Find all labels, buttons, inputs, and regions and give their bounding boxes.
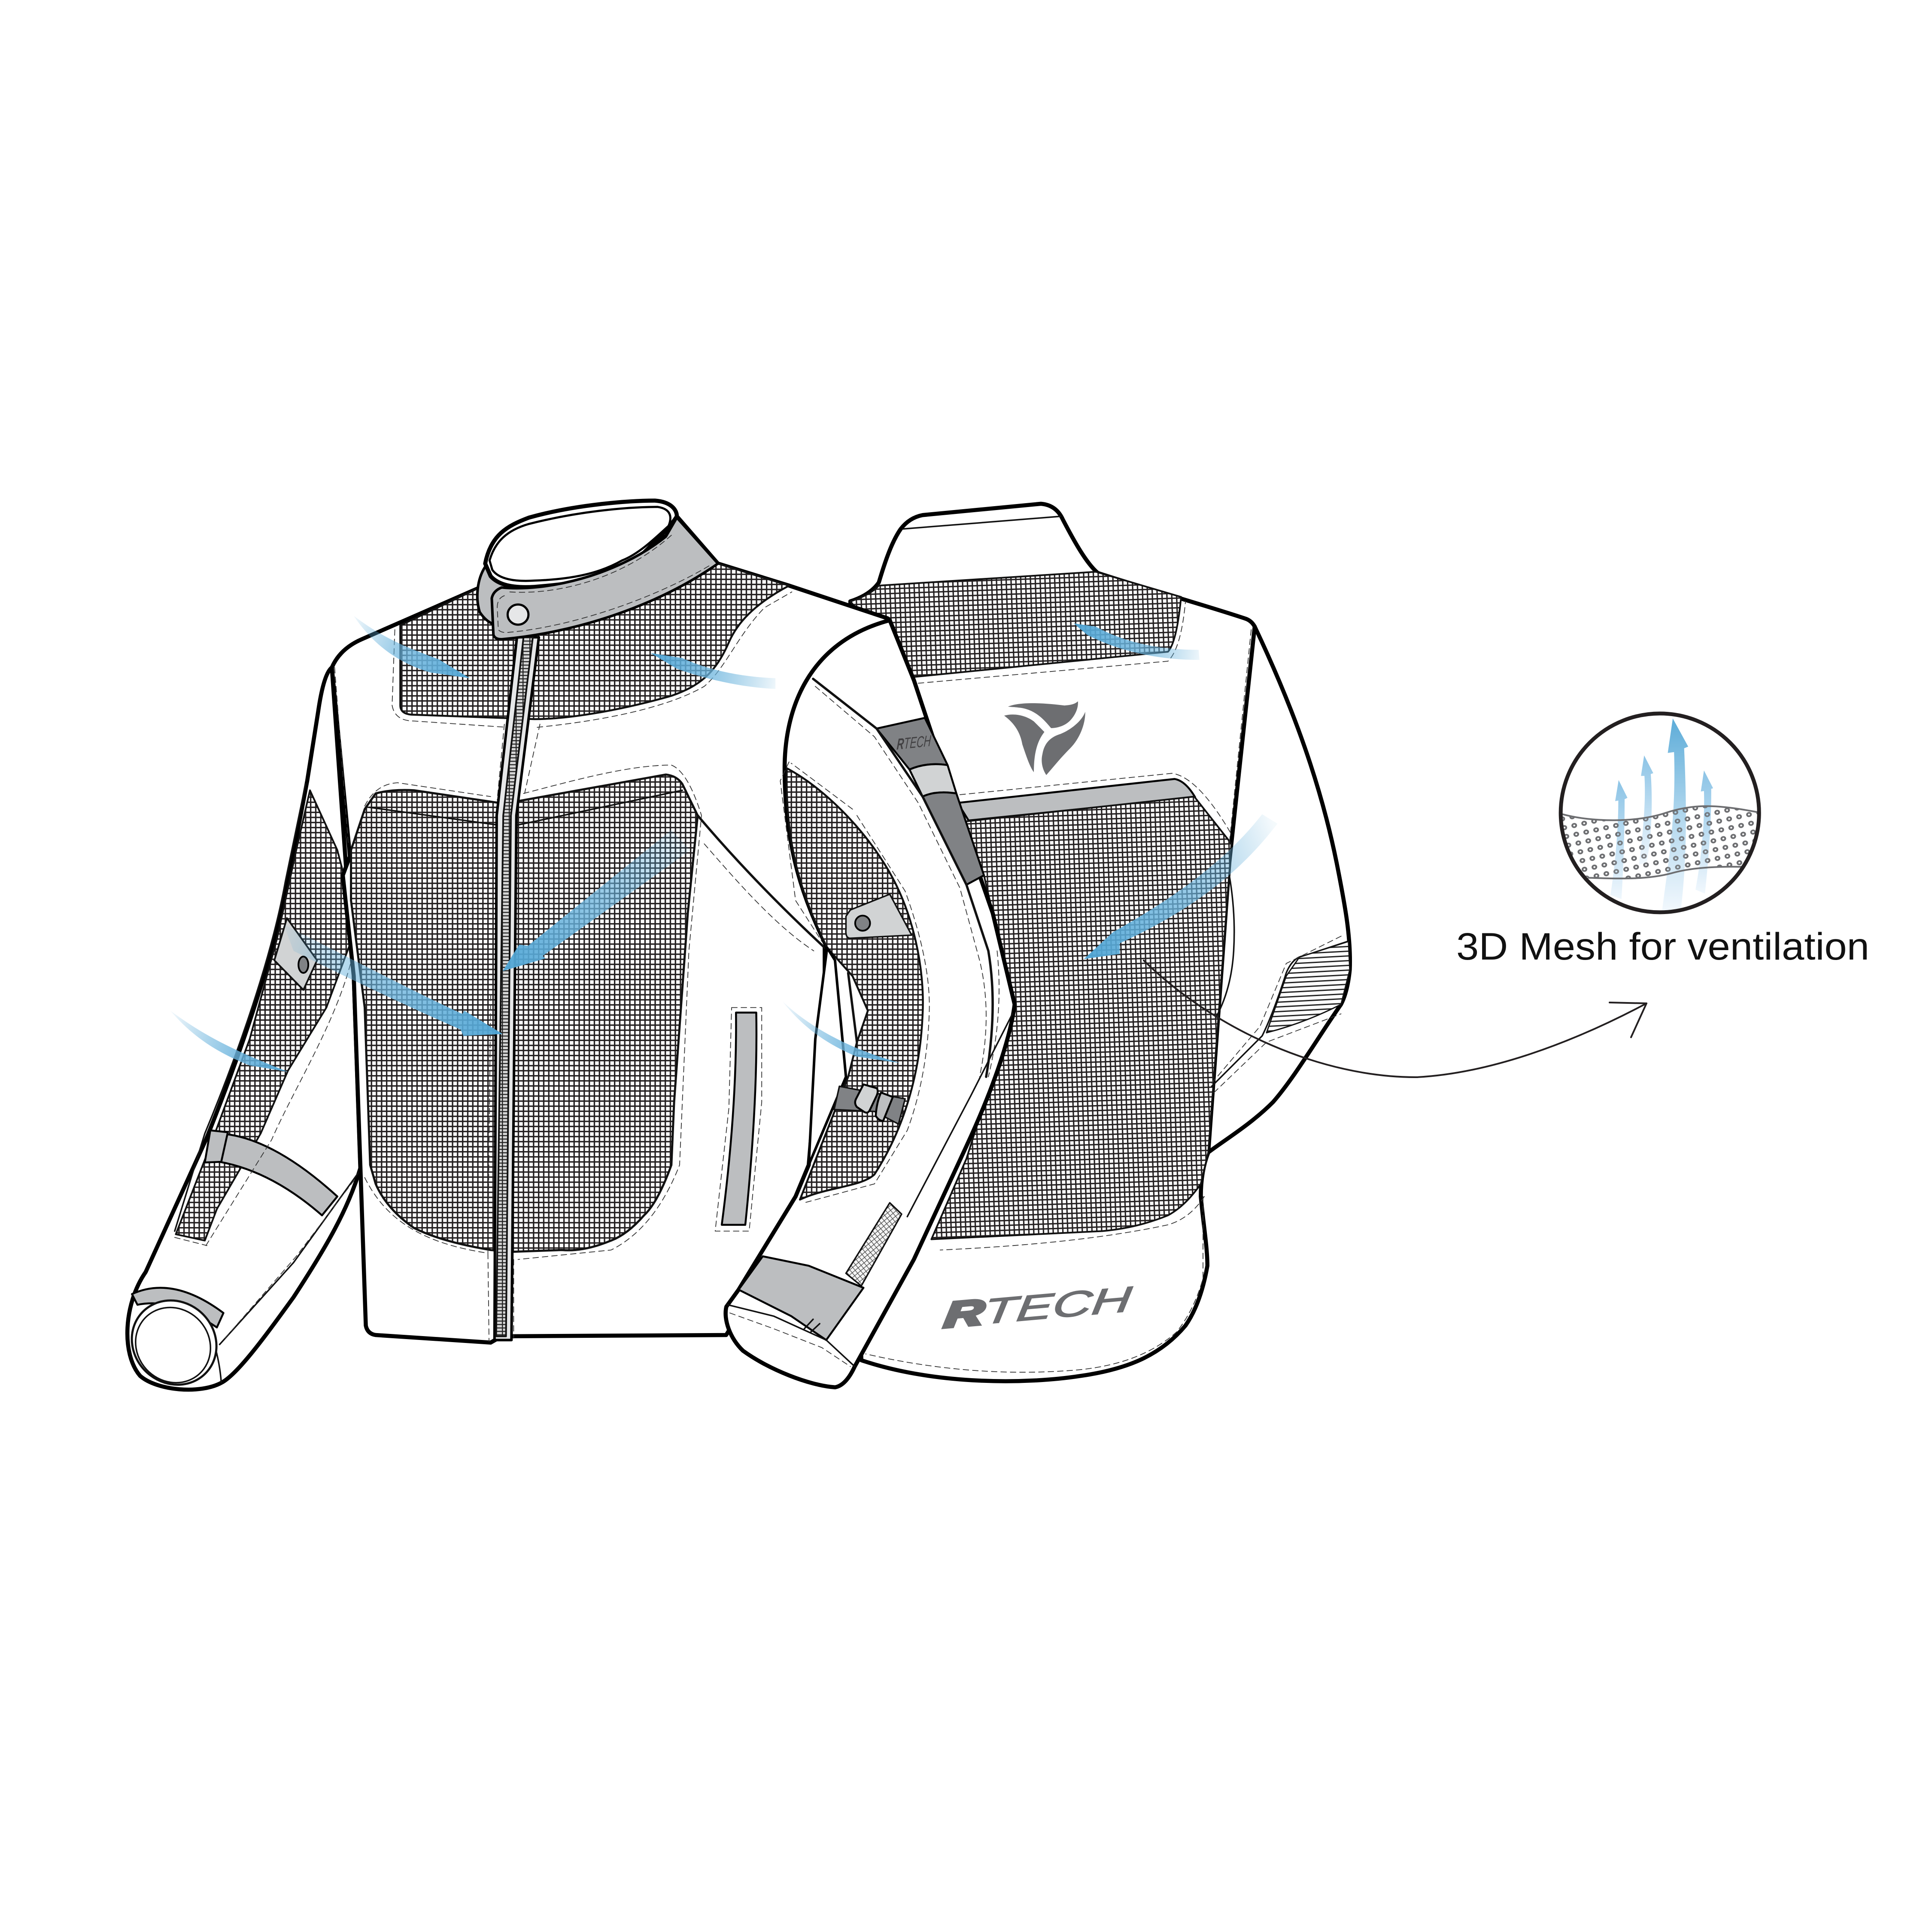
left cuff grey band xyxy=(132,1288,223,1327)
sleeve silhouette xyxy=(726,620,1015,1387)
back jacket silhouette xyxy=(851,504,1350,1381)
torso silhouette xyxy=(332,516,888,1343)
rising air arrow large xyxy=(1662,718,1688,914)
mesh dots xyxy=(1558,806,1759,878)
collar stitching xyxy=(497,535,710,632)
back collar seam xyxy=(903,516,1060,529)
big RTECH wordmark: R TECH xyxy=(942,1279,1134,1335)
sleeve upper dark band xyxy=(877,718,948,769)
cuff seam xyxy=(728,1305,855,1367)
rising air arrow second xyxy=(1639,755,1653,865)
small RTECH sleeve badge: RTECH xyxy=(896,732,932,753)
mesh layer edges xyxy=(1563,806,1759,878)
mesh layer with ventilation xyxy=(1558,718,1759,914)
front right sleeve xyxy=(726,620,1015,1387)
sleeve front airflow arrow xyxy=(782,1001,900,1063)
back sleeve hatched cuff panel xyxy=(1267,942,1350,1033)
chest left airflow arrow xyxy=(354,616,470,678)
left cuff rim xyxy=(124,1290,225,1395)
body side gusset xyxy=(809,948,846,1165)
back sleeve seam lines xyxy=(1212,875,1348,1086)
left sleeve seams xyxy=(213,1170,360,1382)
zipper teeth xyxy=(496,637,533,1336)
left sleeve grey strap xyxy=(219,1133,337,1215)
lower chest mesh panel xyxy=(351,775,698,1252)
left sleeve silhouette xyxy=(128,668,360,1390)
sleeve tab snap xyxy=(855,916,870,931)
cuff grey band xyxy=(738,1256,863,1340)
back sleeve stitching xyxy=(1212,630,1343,1093)
collar snap xyxy=(507,605,529,625)
callout curve xyxy=(1144,960,1646,1077)
sleeve inner forearm seam xyxy=(907,1014,1012,1217)
brand triskelion logo xyxy=(1004,701,1085,775)
chest right airflow arrow xyxy=(650,653,775,689)
callout caption: 3D Mesh for ventilation xyxy=(1456,925,1869,968)
cuff stitching xyxy=(730,1313,851,1367)
sleeve lower dark band xyxy=(923,793,984,885)
back panel stitching xyxy=(866,773,1231,1372)
torso airflow arrow from right xyxy=(503,830,690,971)
back yoke airflow arrow xyxy=(1074,623,1200,660)
torso stitching xyxy=(334,592,814,1341)
rising air arrow third xyxy=(1610,780,1628,899)
back grey trim strip xyxy=(958,779,1195,820)
second strap buckle xyxy=(876,1093,893,1121)
collar band xyxy=(477,516,718,623)
3D mesh detail circle xyxy=(1558,714,1759,914)
sleeve stitching xyxy=(780,687,999,1203)
back panel airflow arrow xyxy=(1084,814,1278,959)
left cuff opening xyxy=(128,1298,218,1392)
armhole seam xyxy=(698,815,825,948)
sleeve band seam xyxy=(813,679,993,1077)
sleeve light band xyxy=(909,764,957,796)
first strap buckle xyxy=(855,1084,878,1113)
pocket stitching xyxy=(715,1008,762,1231)
forearm zip xyxy=(846,1203,902,1286)
left sleeve mesh panel xyxy=(176,790,351,1240)
left sleeve stitching xyxy=(175,957,354,1338)
collar opening outer rim xyxy=(485,501,677,587)
back view of jacket xyxy=(851,504,1350,1381)
collar xyxy=(477,501,718,639)
upper chest mesh panel xyxy=(400,564,789,719)
left sleeve airflow arrow xyxy=(170,1011,288,1072)
sleeve grey strap xyxy=(834,1086,905,1124)
torso airflow arrow from left xyxy=(284,924,503,1036)
zip placket xyxy=(495,637,539,1340)
left sleeve snap xyxy=(298,957,308,973)
side hip pocket xyxy=(722,1013,756,1225)
curved callout arrow xyxy=(1144,960,1646,1077)
collar opening inner rim xyxy=(489,507,670,581)
circle outline xyxy=(1561,714,1759,912)
left sleeve edge seam xyxy=(175,784,306,1231)
chest cross seams xyxy=(369,790,682,825)
body side fold line xyxy=(848,973,857,1042)
callout arrowhead xyxy=(1610,1002,1646,1037)
sleeve mesh panel xyxy=(787,768,923,1200)
front view of jacket xyxy=(124,501,888,1395)
mesh dots over arrows xyxy=(1558,806,1759,878)
circle backdrop xyxy=(1561,714,1759,912)
back yoke stitching xyxy=(918,601,1185,683)
back torso side seam xyxy=(1208,626,1255,1152)
rising air arrow fourth xyxy=(1695,771,1713,894)
left sleeve tab with snap xyxy=(274,918,317,990)
left sleeve buckle xyxy=(205,1130,228,1163)
centre zip xyxy=(495,637,539,1340)
collar flap xyxy=(492,518,718,639)
sleeve tab xyxy=(846,894,911,938)
back main mesh panel xyxy=(931,796,1231,1239)
back yoke mesh panel xyxy=(851,572,1181,677)
